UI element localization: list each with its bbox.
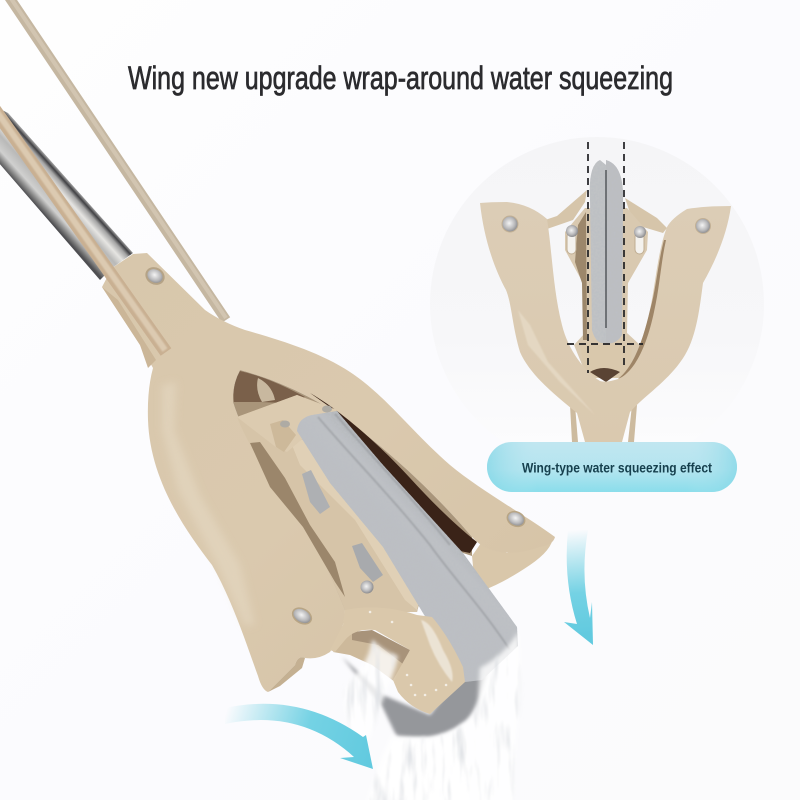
lower wing underside — [472, 537, 553, 590]
inset product: front view of wing squeezer — [480, 142, 731, 442]
slot left — [567, 232, 576, 254]
label pill — [487, 442, 737, 492]
handle collar joint shadow — [102, 287, 156, 368]
water on clip — [421, 620, 453, 682]
mechanism dark slot — [250, 442, 345, 597]
pill edge tint — [487, 442, 737, 492]
shell end mouth shadow — [268, 657, 305, 692]
arrow: bottom — [225, 704, 373, 769]
stainless steel tube — [0, 105, 133, 280]
rivet left — [502, 216, 518, 232]
right water fall — [430, 632, 520, 800]
inner rivet right — [634, 226, 646, 238]
lower water sheet — [365, 722, 470, 800]
front handle rod highlight — [0, 102, 165, 350]
shell rivet left — [290, 605, 314, 627]
shell soft highlight — [162, 382, 255, 625]
bracket rivet right — [322, 406, 332, 412]
sponge left lobe — [590, 160, 606, 343]
droplets on clip — [370, 612, 446, 695]
left water fall — [344, 640, 398, 752]
grey sponge — [297, 411, 518, 682]
bottom gap — [590, 368, 620, 382]
pill text: Wing-type water squeezing effect — [522, 460, 712, 476]
shell shading — [518, 310, 595, 415]
metal clip lower — [352, 543, 383, 582]
shell rivet upper handle — [143, 265, 167, 287]
clip slot recess — [352, 630, 410, 664]
clip lower arm — [333, 632, 410, 682]
left bracket arch — [545, 190, 587, 229]
front clip plate — [330, 607, 465, 714]
pill background — [487, 442, 737, 492]
inner mechanism plate — [565, 208, 648, 372]
bracket rivet left — [280, 420, 290, 428]
handle rods below — [570, 405, 637, 442]
bottom bracket — [580, 345, 632, 378]
shell rivet right — [505, 509, 527, 529]
right bracket arch — [625, 198, 667, 233]
water stream — [344, 632, 520, 800]
main product: mop head with handle — [0, 0, 555, 800]
y-shaped shell — [480, 202, 731, 442]
sponge centre seam — [605, 170, 607, 328]
slot right — [635, 232, 644, 254]
brown interior top — [234, 371, 305, 403]
lower sponge lump — [342, 657, 490, 737]
rivet right — [696, 218, 710, 234]
shell inner edge shadow — [618, 240, 666, 379]
dashed guide lines — [567, 142, 643, 373]
arrow: right — [564, 530, 593, 645]
sponge right lobe — [606, 160, 623, 343]
inner lit bevel — [257, 378, 275, 402]
inner dark edge — [575, 212, 587, 340]
metal clip rivet — [360, 580, 374, 594]
inner rivet left — [566, 225, 578, 237]
mechanism base plate — [237, 395, 420, 612]
sponge seam lines — [318, 414, 510, 650]
front handle rod — [0, 103, 166, 352]
top bracket — [237, 395, 337, 452]
bracket front bevel — [270, 420, 296, 452]
opening in shell — [233, 370, 472, 612]
outer thin handle rod — [7, 0, 226, 320]
metal clip upper — [302, 470, 330, 514]
front rail — [290, 440, 420, 610]
mop body shell — [102, 253, 555, 692]
outer rod highlight — [8, 0, 226, 318]
inset circle background — [430, 137, 764, 471]
dark cavity behind sponge — [310, 393, 477, 553]
